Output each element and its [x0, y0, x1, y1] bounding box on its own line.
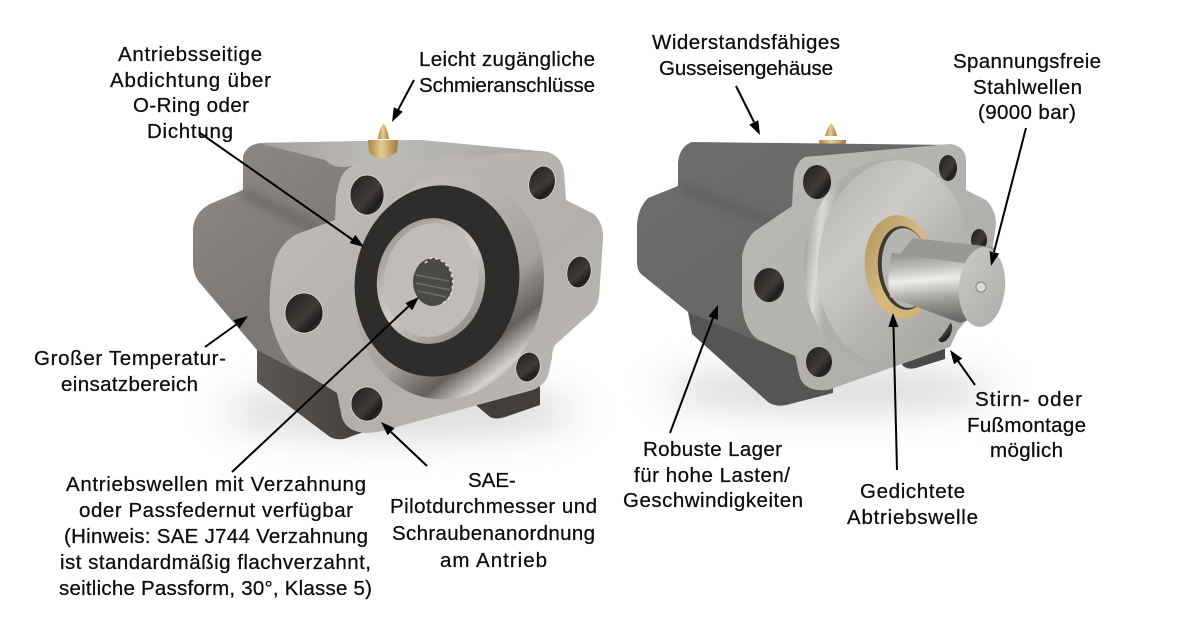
- label: drive seal: O-Ring oder: [133, 94, 249, 117]
- label: SAE pilot: Schraubenanordnung: [392, 522, 595, 545]
- arrow: grease ports: [392, 80, 414, 122]
- right pump: output side: [637, 123, 1008, 406]
- left pump pilot flange: [334, 157, 564, 417]
- label: drive seal: [110, 43, 271, 143]
- label: drive seal: Dichtung: [147, 120, 233, 143]
- arrow: face or foot mount: [950, 350, 975, 385]
- label: cast iron housing: Widerstandsfähiges: [652, 31, 840, 54]
- arrow: drive seal: [200, 133, 364, 247]
- arrow: sealed output shaft: [888, 313, 898, 470]
- label: robust bearings: [623, 438, 803, 512]
- arrow: steel shafts: [990, 128, 1026, 266]
- label: input shaft: [59, 473, 372, 600]
- left pump base feet: [257, 345, 540, 439]
- label: input shaft: Antriebswellen mit Verzahnung: [66, 473, 366, 496]
- right pump housing: [637, 142, 960, 350]
- label: grease ports: [419, 48, 595, 97]
- label: grease ports: Leicht zugängliche: [419, 48, 595, 71]
- right pump housing crease: [680, 187, 780, 225]
- right pump pilot flange: [794, 151, 978, 375]
- left pump top face: [258, 140, 548, 167]
- label: sealed output shaft: Gedichtete: [860, 480, 965, 503]
- shadow under right pump: [660, 366, 1000, 414]
- label: input shaft: ist standardmäßig flachverzahnt,: [60, 551, 371, 574]
- label: face or foot mount: [967, 388, 1086, 462]
- left pump grease fitting: [368, 123, 398, 158]
- label: drive seal: Abdichtung über: [110, 69, 271, 92]
- arrow: cast iron housing: [736, 86, 760, 135]
- left pump flange face: [270, 151, 603, 433]
- label: face or foot mount: möglich: [990, 439, 1063, 462]
- right pump output shaft: [888, 238, 1008, 329]
- label: temperature range: einsatzbereich: [61, 373, 198, 396]
- right pump spline collar: [878, 226, 934, 310]
- left pump hub face: [377, 217, 485, 343]
- label: grease ports: Schmieranschlüsse: [419, 74, 595, 97]
- label: face or foot mount: Stirn- oder: [975, 388, 1082, 411]
- label: sealed output shaft: Abtriebswelle: [847, 506, 978, 529]
- right pump mounting holes: [754, 155, 987, 377]
- left pump housing crease: [243, 192, 330, 236]
- right pump bronze seal: [860, 212, 940, 322]
- label: SAE pilot: SAE-: [468, 469, 516, 492]
- label: steel shafts: [953, 50, 1101, 124]
- label: input shaft: oder Passfedernut verfügbar: [79, 499, 353, 522]
- label: SAE pilot: am Antrieb: [440, 549, 547, 572]
- arrow: input shaft: [232, 297, 419, 472]
- label: temperature range: Großer Temperatur-: [34, 347, 226, 370]
- left pump housing: [193, 140, 560, 400]
- right pump base feet: [688, 312, 945, 406]
- left pump mounting holes: [285, 163, 594, 421]
- shadow under left pump: [220, 384, 580, 440]
- left pump splined shaft bore: [413, 258, 453, 306]
- right pump flange face: [742, 144, 996, 390]
- label: steel shafts: (9000 bar): [978, 101, 1076, 124]
- left pump: input side: [193, 123, 603, 439]
- arrow: SAE pilot: [381, 422, 427, 466]
- right pump grease fitting: [819, 123, 846, 151]
- label: robust bearings: Robuste Lager: [643, 438, 782, 461]
- left pump hub rim: [369, 211, 493, 351]
- label: cast iron housing: [652, 31, 840, 80]
- label: steel shafts: Stahlwellen: [973, 76, 1082, 99]
- left pump seal ring: [340, 172, 534, 390]
- label: drive seal: Antriebsseitige: [118, 43, 262, 66]
- label: temperature range: [34, 347, 226, 396]
- label: cast iron housing: Gusseisengehäuse: [659, 57, 833, 80]
- label: robust bearings: für hohe Lasten/: [634, 464, 790, 487]
- right pump seal bore: [874, 224, 934, 312]
- label: SAE pilot: [390, 469, 597, 572]
- arrow: robust bearings: [670, 305, 718, 433]
- label: sealed output shaft: [847, 480, 978, 529]
- label: robust bearings: Geschwindigkeiten: [623, 489, 803, 512]
- arrow: temperature range: [205, 316, 248, 347]
- label: input shaft: seitliche Passform, 30°, Klasse 5): [59, 577, 372, 600]
- right pump flange disc: [808, 153, 978, 371]
- label: input shaft: (Hinweis: SAE J744 Verzahnung: [64, 525, 368, 548]
- label: steel shafts: Spannungsfreie: [953, 50, 1101, 73]
- label: face or foot mount: Fußmontage: [967, 414, 1086, 437]
- label: SAE pilot: Pilotdurchmesser und: [390, 495, 597, 518]
